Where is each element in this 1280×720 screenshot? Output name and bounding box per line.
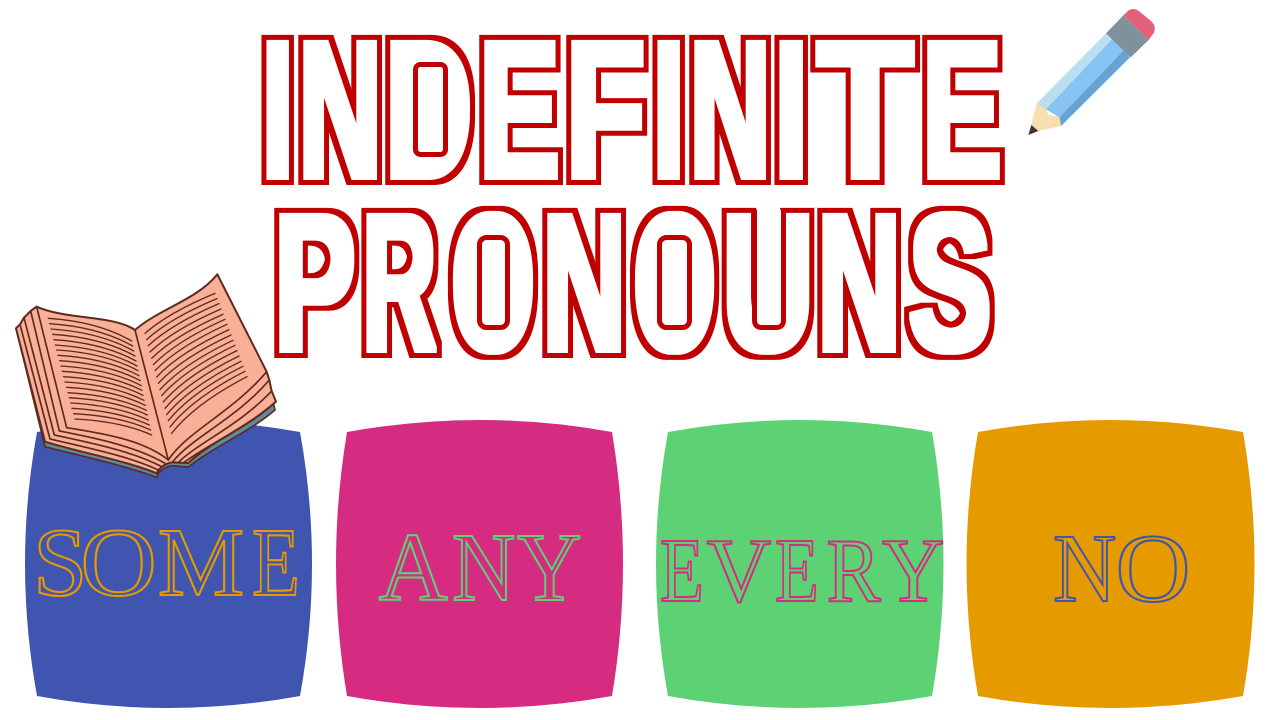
- title: INDEFINITE: I: [774, 1, 808, 219]
- panel: NO: [966, 420, 1254, 708]
- title: PRONOUNS: P: [274, 174, 356, 392]
- label: SOME: S: [33, 509, 88, 617]
- title: PRONOUNS: O: [452, 174, 535, 392]
- title: INDEFINITE: N: [299, 1, 382, 219]
- label: NO: N: [1053, 515, 1116, 622]
- title: PRONOUNS: O: [634, 174, 716, 392]
- label: SOME: O: [80, 509, 157, 617]
- label: ANY: Y: [517, 514, 582, 621]
- title: INDEFINITE: F: [566, 1, 645, 219]
- title: PRONOUNS: S: [908, 174, 992, 392]
- label: EVERY: E: [775, 520, 819, 621]
- left page lines: [48, 318, 152, 435]
- panel: SOME: [25, 420, 312, 708]
- page stack: [16, 274, 276, 473]
- icon: open book: [16, 274, 276, 477]
- label: ANY: A: [379, 514, 448, 621]
- icon: pencil: [1028, 9, 1155, 135]
- right page lines: [145, 293, 247, 433]
- book cover: [16, 328, 275, 477]
- label: ANY: N: [452, 514, 515, 621]
- label: SOME: E: [252, 509, 300, 617]
- title: PRONOUNS: N: [818, 174, 901, 392]
- label: NO: O: [1116, 515, 1190, 622]
- panel: ANY: [336, 420, 623, 708]
- panel: EVERY: [656, 420, 944, 708]
- title: INDEFINITE: E: [922, 1, 1002, 219]
- label: SOME: M: [158, 509, 244, 617]
- title: PRONOUNS: N: [543, 174, 626, 392]
- title: INDEFINITE: I: [262, 1, 294, 219]
- title: INDEFINITE: I: [653, 1, 685, 219]
- label: EVERY: E: [660, 520, 704, 621]
- title: INDEFINITE: D: [385, 1, 472, 219]
- title: INDEFINITE: E: [479, 1, 560, 219]
- label: EVERY: R: [827, 520, 881, 621]
- title: INDEFINITE: T: [816, 1, 914, 219]
- label: EVERY: V: [707, 520, 771, 621]
- label: EVERY: Y: [882, 520, 944, 621]
- page edges: [20, 307, 276, 470]
- title: INDEFINITE: N: [690, 1, 770, 219]
- title: PRONOUNS: U: [722, 174, 814, 392]
- title: PRONOUNS: R: [363, 174, 436, 392]
- title letter counters: [416, 64, 784, 328]
